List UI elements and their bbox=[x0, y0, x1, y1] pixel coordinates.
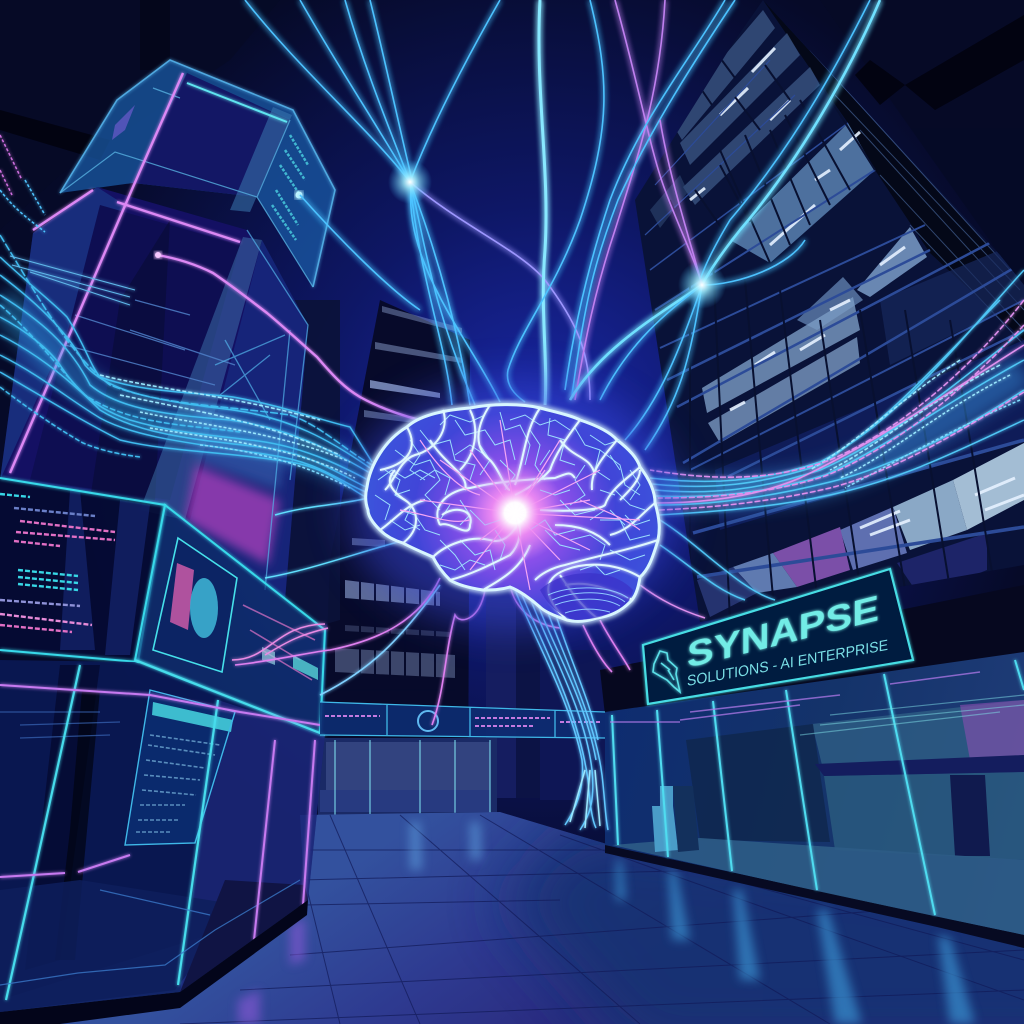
background building bbox=[270, 300, 470, 820]
sign: Synapse Solutions bbox=[643, 569, 913, 704]
lower glass box bbox=[0, 660, 325, 1024]
lit lower row bbox=[953, 443, 1024, 530]
right data stream bbox=[640, 270, 1024, 618]
sign title: SYNAPSE bbox=[687, 588, 879, 676]
pink inner fibres bbox=[400, 420, 640, 590]
glass edge lines bbox=[6, 660, 325, 1000]
lower pink and cyan filaments bbox=[235, 578, 630, 725]
lit window rows bbox=[335, 306, 462, 678]
lit upper windows bbox=[650, 10, 820, 228]
core light bbox=[467, 465, 563, 561]
dark side face bbox=[763, 0, 1024, 340]
glowing brain bbox=[347, 380, 677, 630]
central pillars bbox=[486, 590, 610, 800]
pink edge lines bbox=[10, 73, 420, 473]
left data stream bbox=[0, 135, 405, 578]
sign panel bbox=[643, 569, 913, 704]
sign subtitle: SOLUTIONS - AI ENTERPRISE bbox=[687, 637, 888, 690]
floor light reflections bbox=[238, 822, 975, 1024]
neural strands from above bbox=[245, 0, 880, 450]
floor tile grid bbox=[180, 815, 1024, 1024]
mullions bbox=[670, 55, 1000, 620]
brain silhouette bbox=[366, 405, 659, 621]
brain stem bbox=[515, 590, 608, 830]
lit mid rows bbox=[702, 297, 860, 413]
right tower building bbox=[620, 0, 1024, 630]
brain halo bbox=[347, 380, 677, 630]
center storefront bbox=[318, 738, 497, 822]
purple nebula panel bbox=[185, 400, 285, 565]
left glass tower bbox=[0, 60, 420, 1024]
brain scan screen bbox=[135, 505, 328, 735]
cerebellum bbox=[540, 573, 633, 620]
ceiling beams bbox=[0, 0, 1024, 290]
floor bbox=[0, 800, 1024, 1024]
left code panel bbox=[0, 478, 165, 662]
floor bands bbox=[645, 60, 1024, 577]
right storefront bbox=[600, 585, 1024, 948]
brain folds bbox=[380, 405, 658, 620]
sign logo bbox=[653, 651, 680, 692]
data banner bbox=[320, 702, 605, 738]
tower top box bbox=[60, 60, 335, 287]
tower body bbox=[0, 73, 420, 600]
kiosk bbox=[652, 786, 699, 852]
hubs bbox=[388, 160, 726, 309]
ceiling light strips bbox=[690, 48, 1024, 535]
fine capillaries bbox=[375, 412, 650, 575]
